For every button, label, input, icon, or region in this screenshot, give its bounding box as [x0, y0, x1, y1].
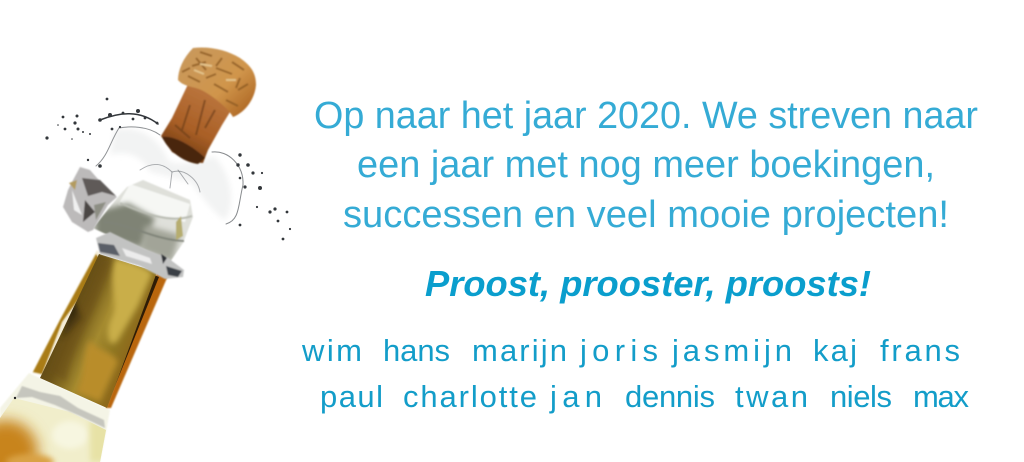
- team names: wim: [301, 333, 362, 368]
- team names: charlotte: [403, 379, 537, 414]
- message text: [314, 95, 978, 236]
- bottle body with liquid: [0, 373, 110, 462]
- team names: paul: [320, 379, 383, 414]
- message text: een jaar met nog meer boekingen,: [357, 144, 935, 186]
- team names: jasmijn: [671, 333, 792, 368]
- team names: frans: [880, 333, 960, 368]
- team names: niels: [830, 379, 892, 414]
- cork head: [178, 47, 256, 117]
- silver foil collar: [96, 232, 184, 279]
- heading: toast: Proost, prooster, proosts!: [425, 263, 871, 304]
- team names: joris: [579, 333, 658, 368]
- illustration: champagne bottle with popping cork: [0, 47, 291, 462]
- bottle neck glass: [93, 180, 193, 262]
- team names: marijn: [472, 333, 567, 368]
- message text: successen en veel mooie projecten!: [343, 194, 949, 236]
- team names: twan: [735, 379, 808, 414]
- team names: hans: [383, 333, 450, 368]
- team names: jan: [549, 379, 602, 414]
- message text: Op naar het jaar 2020. We streven naar: [314, 95, 978, 137]
- gold foil: [30, 250, 167, 410]
- water splash: [96, 114, 243, 224]
- water droplets: [45, 98, 291, 240]
- cork stem: [161, 80, 238, 163]
- team names: kaj: [813, 333, 857, 368]
- team names: [301, 333, 970, 414]
- team names: dennis: [625, 379, 715, 414]
- team names: max: [913, 379, 970, 414]
- silver foil torn piece: [63, 167, 117, 232]
- cork: [161, 47, 256, 164]
